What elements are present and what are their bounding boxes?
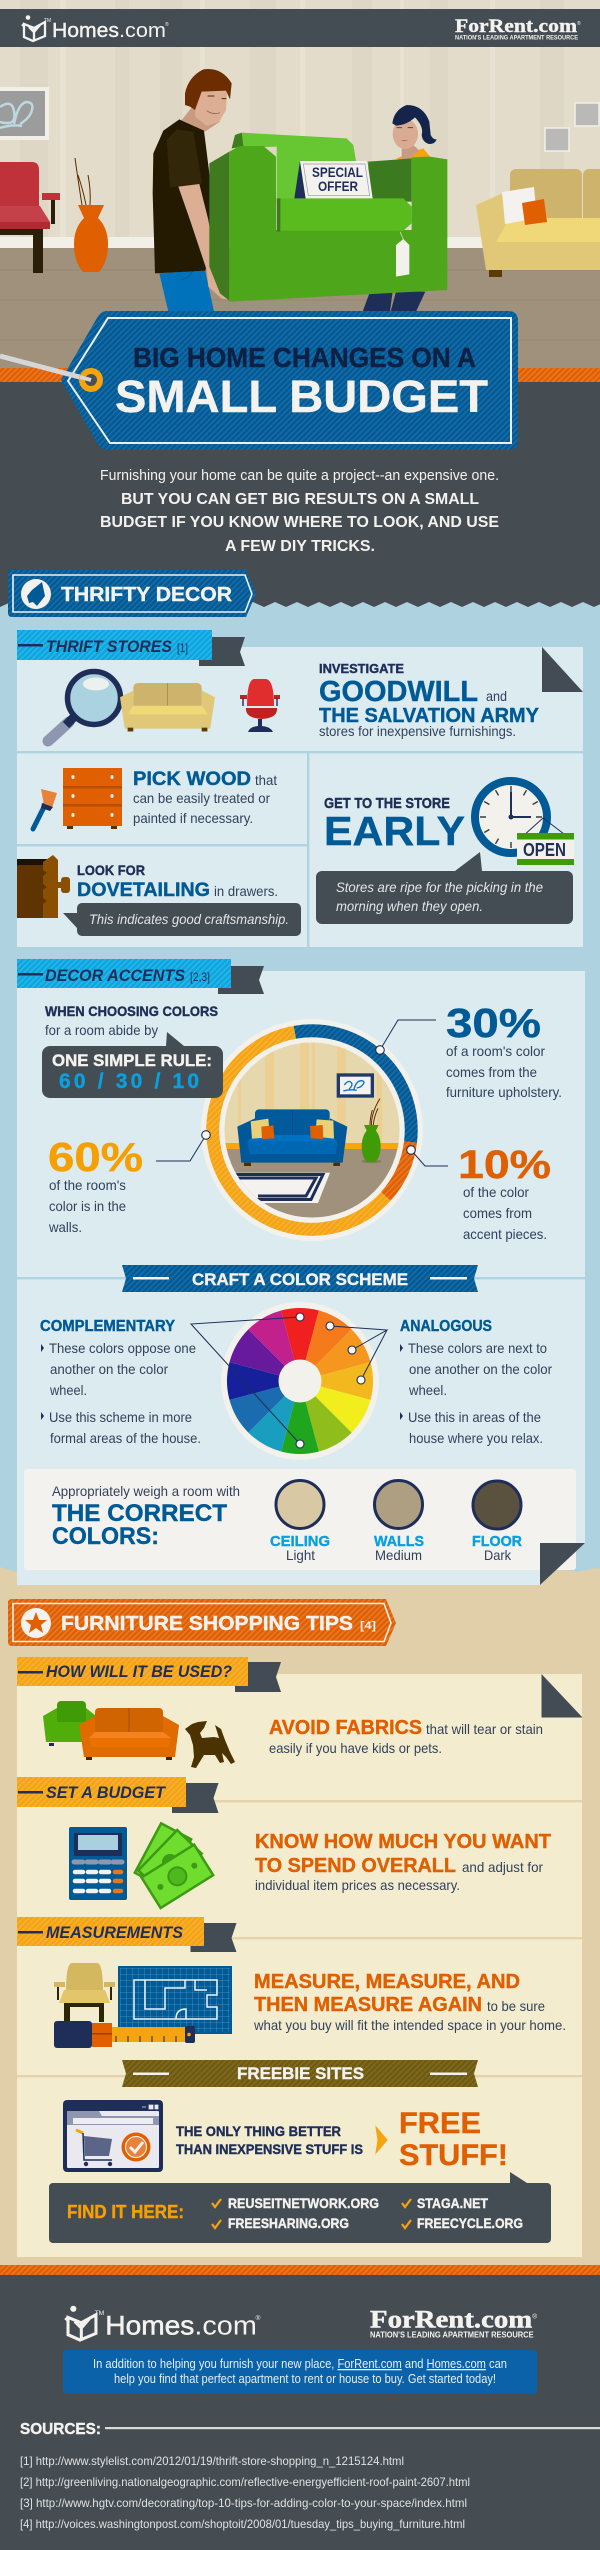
- text: goodwill: THE SALVATION ARMY: [319, 705, 540, 727]
- panel: thrift stores: [1]: [177, 641, 188, 655]
- sources: [2] http://greenliving.nationalgeographic.com/reflective-energyefficient-roof-paint-2607.html: [20, 2475, 470, 2489]
- text: dovetailing: [77, 862, 278, 901]
- text: when choosing colors: WHEN CHOOSING COLORS: [45, 1003, 218, 1019]
- text: complementary: [40, 1318, 201, 1446]
- text: avoid fabrics: that will tear or stain: [426, 1721, 543, 1737]
- hero scene: [0, 0, 600, 368]
- stat: 60%: of the room's: [49, 1177, 126, 1193]
- icon: clock: [475, 781, 547, 853]
- text: analogous: [400, 1318, 552, 1446]
- logo: Homes.com: [22, 15, 169, 42]
- footer logo: Homes.com: .com: [194, 2311, 257, 2341]
- text: avoid fabrics: [269, 1717, 543, 1756]
- footer message box: [63, 2350, 537, 2394]
- panel: the correct colors: THE CORRECT: [52, 1500, 227, 1527]
- text: complementary: COMPLEMENTARY: [40, 1318, 176, 1335]
- banner: craft a color scheme: CRAFT A COLOR SCHEME: [192, 1270, 408, 1289]
- logo: ForRent.com: ForRent.com: [455, 16, 577, 37]
- text: know how much: KNOW HOW MUCH YOU WANT: [255, 1831, 551, 1853]
- text: analogous: one another on the color: [409, 1361, 552, 1377]
- panel: the correct colors: COLORS:: [52, 1523, 159, 1550]
- text: dovetailing: LOOK FOR: [77, 862, 145, 878]
- sources: SOURCES:: [20, 2421, 101, 2438]
- heading badge: thrifty decor: [8, 570, 256, 617]
- text: measure: [253, 1971, 566, 2033]
- text: avoid fabrics: easily if you have kids or pets.: [269, 1740, 442, 1756]
- intro text: BUDGET IF YOU KNOW WHERE TO LOOK, AND USE: [100, 514, 499, 531]
- stat: 30%: comes from the: [446, 1064, 537, 1080]
- swatch: walls: Medium: [375, 1547, 422, 1563]
- stat: 30%: of a room's color: [446, 1043, 545, 1059]
- text: get to the store early: EARLY: [324, 808, 465, 854]
- icon: yellow sofa: [120, 683, 215, 731]
- swatch: ceiling: [270, 1480, 330, 1563]
- text: goodwill: GOODWILL: [319, 676, 478, 708]
- callout: find it here: [49, 2172, 551, 2243]
- icon: calculator: [69, 1827, 127, 1900]
- man: [153, 69, 232, 312]
- swatch: walls: WALLS: [374, 1533, 424, 1550]
- framed picture: [337, 1073, 374, 1098]
- ribbon: measurements: MEASUREMENTS: [46, 1923, 184, 1942]
- text: know how much: individual item prices as necessary.: [255, 1877, 460, 1893]
- footer logo: Homes.com: TM: [95, 2310, 104, 2317]
- ribbon flag: [218, 966, 264, 994]
- text: know how much: and adjust for: [462, 1859, 543, 1875]
- icon: tape measure: [54, 2021, 195, 2048]
- footer logo: ForRent.com: ®: [532, 2312, 537, 2320]
- blue sofa: [237, 1109, 347, 1166]
- text: when choosing colors: [45, 1003, 218, 1038]
- ribbon: how will it be used: HOW WILL IT BE USED?: [46, 1662, 233, 1681]
- text: free stuff: FREE: [399, 2107, 481, 2140]
- footer message box: help you find that perfect apartment to rent or house to buy. Get started today!: [114, 2371, 496, 2386]
- swatch: ceiling: Light: [286, 1547, 315, 1563]
- icon: green armchair: [43, 1701, 96, 1746]
- text: pick wood: PICK WOOD: [133, 769, 251, 790]
- footer logo: ForRent.com: NATION'S LEADING APARTMENT RESOURCE: [370, 2331, 534, 2340]
- panel: decor accents: [17, 959, 585, 1585]
- room scene: [224, 1040, 400, 1220]
- text: avoid fabrics: AVOID FABRICS: [269, 1717, 422, 1739]
- color wheel: [191, 1302, 387, 1460]
- text: know how much: [255, 1831, 551, 1893]
- woman: [363, 105, 437, 312]
- red chair: [0, 162, 60, 273]
- stat: 30%: 30%: [446, 1000, 541, 1046]
- callout: morning: morning when they open.: [336, 898, 483, 914]
- swatch: walls: [374, 1480, 424, 1563]
- sources: [3] http://www.hgtv.com/decorating/top-10-tips-for-adding-color-to-your-space/index.html: [20, 2496, 467, 2510]
- sign text: OFFER: [318, 178, 358, 194]
- callout: craftsmanship: [63, 903, 301, 936]
- icon: paint brush: [33, 789, 57, 829]
- panel: decor accents: [2,3]: [190, 970, 210, 984]
- stat: 10%: comes from: [463, 1205, 532, 1221]
- yellow sofa: [476, 169, 600, 277]
- text: dovetailing: in drawers.: [214, 883, 278, 899]
- text: analogous: These colors are next to: [408, 1340, 547, 1356]
- footer logo: Homes.com: [65, 2306, 261, 2341]
- special offer sign: [294, 161, 373, 198]
- text: dovetailing: DOVETAILING: [77, 880, 210, 901]
- text: goodwill: INVESTIGATE: [319, 661, 404, 676]
- title tag: [61, 311, 518, 450]
- wheel pointers: [191, 1317, 300, 1444]
- blue section background: [0, 602, 600, 1600]
- intro text: Furnishing your home can be quite a project--an expensive one.: [100, 467, 499, 484]
- text: analogous: wheel.: [408, 1382, 447, 1398]
- heading badge: thrifty decor: THRIFTY DECOR: [61, 584, 233, 606]
- logo: Homes.com: .com: [119, 20, 166, 42]
- text: analogous: Use this in areas of the: [408, 1409, 541, 1425]
- text: goodwill: and: [486, 688, 507, 704]
- icon: orange sofa: [79, 1708, 179, 1760]
- tag hole: [79, 368, 103, 392]
- text: measure: what you buy will fit the intended space in your home.: [253, 2017, 566, 2033]
- stat: 60%: 60%: [48, 1134, 143, 1180]
- text: pick wood: [133, 769, 277, 826]
- intro text: [100, 467, 499, 555]
- text: get to the store early: GET TO THE STORE: [324, 795, 450, 812]
- panel: furniture tips: [17, 1657, 582, 2257]
- wall frames: [545, 103, 599, 151]
- ribbon: set a budget: [17, 1777, 218, 1813]
- stat: 10%: accent pieces.: [463, 1226, 547, 1242]
- icon: blueprint: [118, 1966, 232, 2034]
- icon: money: [135, 1823, 213, 1908]
- swatch: ceiling: CEILING: [270, 1533, 330, 1550]
- page fold: [542, 1674, 582, 1718]
- intro text: A FEW DIY TRICKS.: [225, 538, 375, 555]
- baseboard: [0, 237, 482, 248]
- callout: one simple rule: ONE SIMPLE RULE:: [52, 1052, 212, 1070]
- icon: star: [21, 1608, 51, 1638]
- orange vase: [74, 158, 108, 272]
- callout: one simple rule: 60 / 30 / 10: [59, 1070, 199, 1093]
- icon: check badge: [122, 2132, 150, 2162]
- panel: the correct colors: [24, 1469, 576, 1570]
- logo: ForRent.com: ®: [577, 20, 581, 27]
- swatch: floor: Dark: [484, 1547, 512, 1563]
- green armchair: [209, 133, 447, 302]
- stat: 10%: of the color: [463, 1184, 529, 1200]
- panel: the correct colors: Appropriately weigh a room with: [52, 1483, 240, 1499]
- text: complementary: formal areas of the house.: [50, 1430, 201, 1446]
- stat: 60%: walls.: [48, 1219, 82, 1235]
- footer logo: ForRent.com: ForRent.com: [370, 2306, 532, 2334]
- sources: [4] http://voices.washingtonpost.com/shoptoit/2008/01/tuesday_tips_buying_furniture.html: [20, 2517, 465, 2531]
- icon: office chair: [240, 679, 280, 732]
- banner: freebie sites: [122, 2060, 478, 2087]
- wall picture: [0, 87, 49, 140]
- stat: 10%: [458, 1143, 551, 1242]
- intro text: BUT YOU CAN GET BIG RESULTS ON A SMALL: [121, 491, 479, 508]
- top bar: [0, 9, 600, 47]
- footer logo: Homes.com: Homes: [105, 2311, 194, 2341]
- stat: 60%: [48, 1134, 143, 1235]
- ribbon: [17, 959, 231, 988]
- ribbon: set a budget: SET A BUDGET: [46, 1783, 167, 1802]
- icon: magnifier: [48, 672, 120, 741]
- sources: [20, 2421, 600, 2531]
- text: when choosing colors: for a room abide by: [45, 1022, 158, 1038]
- callout: find it here: REUSEITNETWORK.ORG: [228, 2195, 379, 2211]
- text: pick wood: can be easily treated or: [133, 790, 270, 806]
- ribbon: [17, 630, 212, 660]
- ribbon flag: [199, 637, 245, 666]
- stat: 30%: furniture upholstery.: [446, 1084, 562, 1100]
- floor: [0, 248, 600, 368]
- icon: yellow chair: [54, 1963, 115, 2022]
- icon: open sign: [517, 818, 574, 865]
- icon: drawer: [17, 855, 70, 918]
- text: measure: MEASURE, MEASURE, AND: [254, 1971, 520, 1993]
- logo: Homes.com: Homes: [52, 20, 119, 42]
- sign text: [312, 168, 363, 191]
- callout: craftsmanship: This indicates good craftsmanship.: [89, 911, 289, 927]
- text: analogous: house where you relax.: [409, 1430, 543, 1446]
- footer message box: In addition to helping you furnish your new place, ForRent.com and Homes.com can: [93, 2356, 507, 2371]
- title line 2: SMALL BUDGET: [115, 371, 488, 422]
- heading badge: furniture shopping tips: [4]: [360, 1620, 376, 1632]
- rug: [236, 1172, 330, 1204]
- swatch: floor: [472, 1481, 522, 1563]
- text: analogous: ANALOGOUS: [400, 1318, 492, 1335]
- callout: find it here: FIND IT HERE:: [67, 2202, 184, 2222]
- text: complementary: another on the color: [50, 1361, 168, 1377]
- panel: decor accents: DECOR ACCENTS: [45, 966, 186, 985]
- logo: Homes.com: TM: [44, 18, 51, 24]
- green vase: [361, 1099, 381, 1163]
- orange footer band: [0, 2265, 600, 2275]
- callout: find it here: STAGA.NET: [417, 2195, 488, 2211]
- stat: 60%: color is in the: [49, 1198, 126, 1214]
- panel: thrift stores: [17, 630, 583, 947]
- text: complementary: wheel.: [49, 1382, 87, 1398]
- text: pick wood: painted if necessary.: [133, 810, 253, 826]
- icon: dog: [185, 1721, 235, 1768]
- callout: find it here: FREECYCLE.ORG: [417, 2215, 523, 2231]
- text: free stuff: [176, 2107, 508, 2172]
- swatch: floor: FLOOR: [472, 1533, 522, 1550]
- banner: freebie sites: FREEBIE SITES: [237, 2064, 364, 2083]
- sources: [1] http://www.stylelist.com/2012/01/19/thrift-store-shopping_n_1215124.html: [20, 2454, 404, 2468]
- callout: find it here: FREESHARING.ORG: [228, 2215, 349, 2231]
- callout: morning: [316, 852, 573, 924]
- stat: 30%: [446, 1000, 562, 1100]
- page fold: [540, 1543, 585, 1585]
- footer logo: Homes.com: ®: [256, 2314, 261, 2322]
- sign text: SPECIAL: [312, 164, 363, 180]
- price tag: [396, 232, 409, 277]
- text: measure: THEN MEASURE AGAIN: [254, 1994, 482, 2016]
- wall: [0, 0, 600, 250]
- text: complementary: These colors oppose one: [49, 1340, 196, 1356]
- text: goodwill: stores for inexpensive furnishings.: [319, 723, 516, 739]
- figures and chair: [153, 69, 447, 312]
- logo: ForRent.com: NATION'S LEADING APARTMENT RESOURCE: [455, 34, 578, 42]
- heading badge: furniture shopping tips: [8, 1599, 396, 1646]
- sand section background: [0, 1567, 600, 2265]
- icon: open sign: OPEN: [523, 840, 566, 860]
- text: free stuff: THE ONLY THING BETTER: [176, 2123, 341, 2139]
- text: know how much: TO SPEND OVERALL: [255, 1855, 456, 1877]
- callout: one simple rule: [42, 1032, 223, 1098]
- stat: 10%: 10%: [458, 1143, 551, 1187]
- text: goodwill: [319, 661, 540, 739]
- text: free stuff: THAN INEXPENSIVE STUFF IS: [176, 2141, 363, 2157]
- text: complementary: Use this scheme in more: [49, 1409, 192, 1425]
- panel: thrift stores: THRIFT STORES: [46, 637, 173, 656]
- text: measure: to be sure: [487, 1998, 545, 2014]
- orange band: [0, 368, 600, 382]
- page fold: [542, 647, 583, 692]
- callout: morning: Stores are ripe for the picking in the: [336, 879, 543, 895]
- callout lines: [156, 1020, 448, 1166]
- text: free stuff: STUFF!: [399, 2139, 508, 2172]
- icon: dresser: [63, 768, 122, 829]
- ribbon: measurements: [17, 1917, 236, 1952]
- ribbon: how will it be used: [17, 1657, 281, 1692]
- logo: Homes.com: ®: [165, 21, 169, 28]
- banner: craft a color scheme: [122, 1265, 478, 1292]
- text: pick wood: that: [255, 772, 277, 788]
- icon: price tag: [21, 579, 51, 609]
- title line 1: BIG HOME CHANGES ON A: [133, 342, 476, 373]
- icon: browser window: [63, 2100, 163, 2172]
- icon: shopping cart: [76, 2130, 112, 2166]
- heading badge: furniture shopping tips: FURNITURE SHOPPING TIPS: [61, 1613, 353, 1635]
- donut chart: [201, 1019, 423, 1241]
- tag string: [0, 356, 91, 380]
